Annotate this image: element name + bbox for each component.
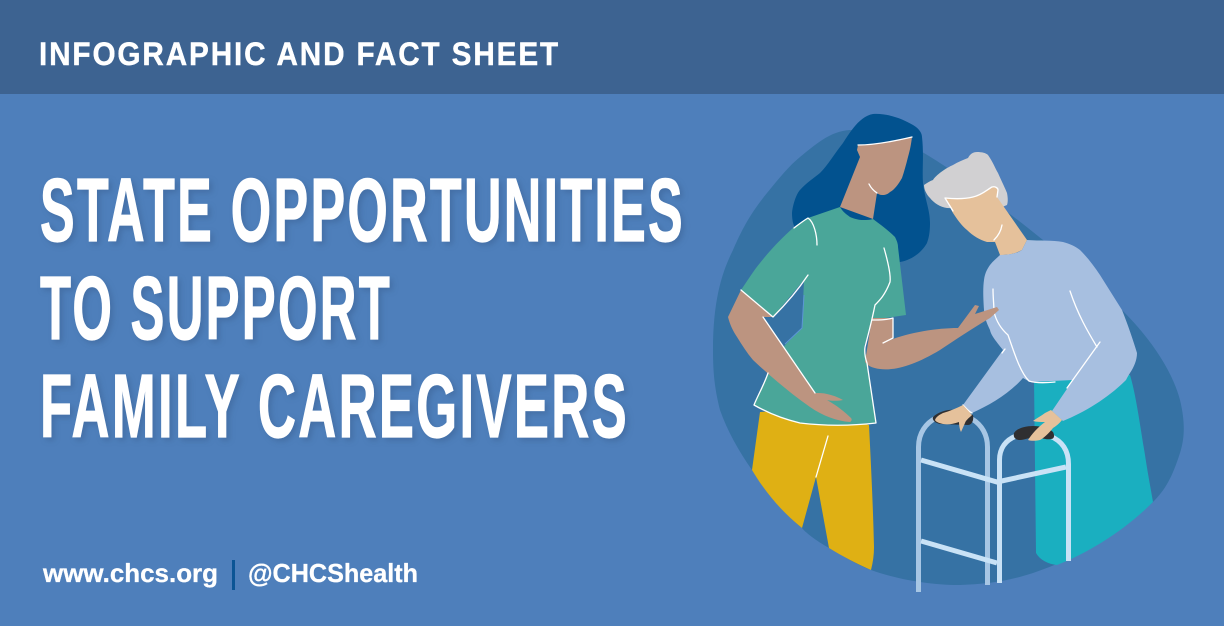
caregiver right arm — [865, 305, 999, 369]
caregiver hair — [792, 114, 930, 300]
back hand — [935, 405, 972, 432]
background blob — [713, 130, 1184, 585]
inner shirt edge highlight — [785, 295, 804, 344]
illustration: caregiver helping older woman — [713, 114, 1184, 592]
title: TO SUPPORT — [40, 259, 392, 359]
caregiver trousers — [752, 410, 874, 570]
footer links — [42, 558, 418, 590]
header label: INFOGRAPHIC AND FACT SHEET — [39, 36, 560, 72]
older woman skirt — [1034, 375, 1153, 565]
caregiver left arm — [728, 290, 852, 422]
title: FAMILY CAREGIVERS — [40, 357, 629, 457]
header band — [0, 0, 1224, 94]
caregiver face and neck — [840, 137, 912, 219]
footer links: www.chcs.org — [42, 558, 218, 588]
older woman face and neck — [945, 187, 1027, 255]
front grip — [1014, 426, 1054, 440]
older woman — [924, 152, 1137, 421]
footer links: @CHCShealth — [248, 558, 418, 588]
back grip — [933, 410, 973, 425]
front hand — [1028, 410, 1062, 441]
caregiver shirt — [741, 207, 906, 425]
walker front frame — [921, 436, 1068, 583]
title: STATE OPPORTUNITIES — [40, 161, 685, 261]
sweater fold lines — [945, 187, 1100, 413]
walker back frame — [918, 418, 988, 592]
older woman sweater — [963, 240, 1137, 421]
older woman hair — [924, 152, 1008, 210]
caregiver — [728, 137, 999, 570]
caregiver outline strokes — [741, 137, 912, 477]
title — [40, 161, 685, 457]
